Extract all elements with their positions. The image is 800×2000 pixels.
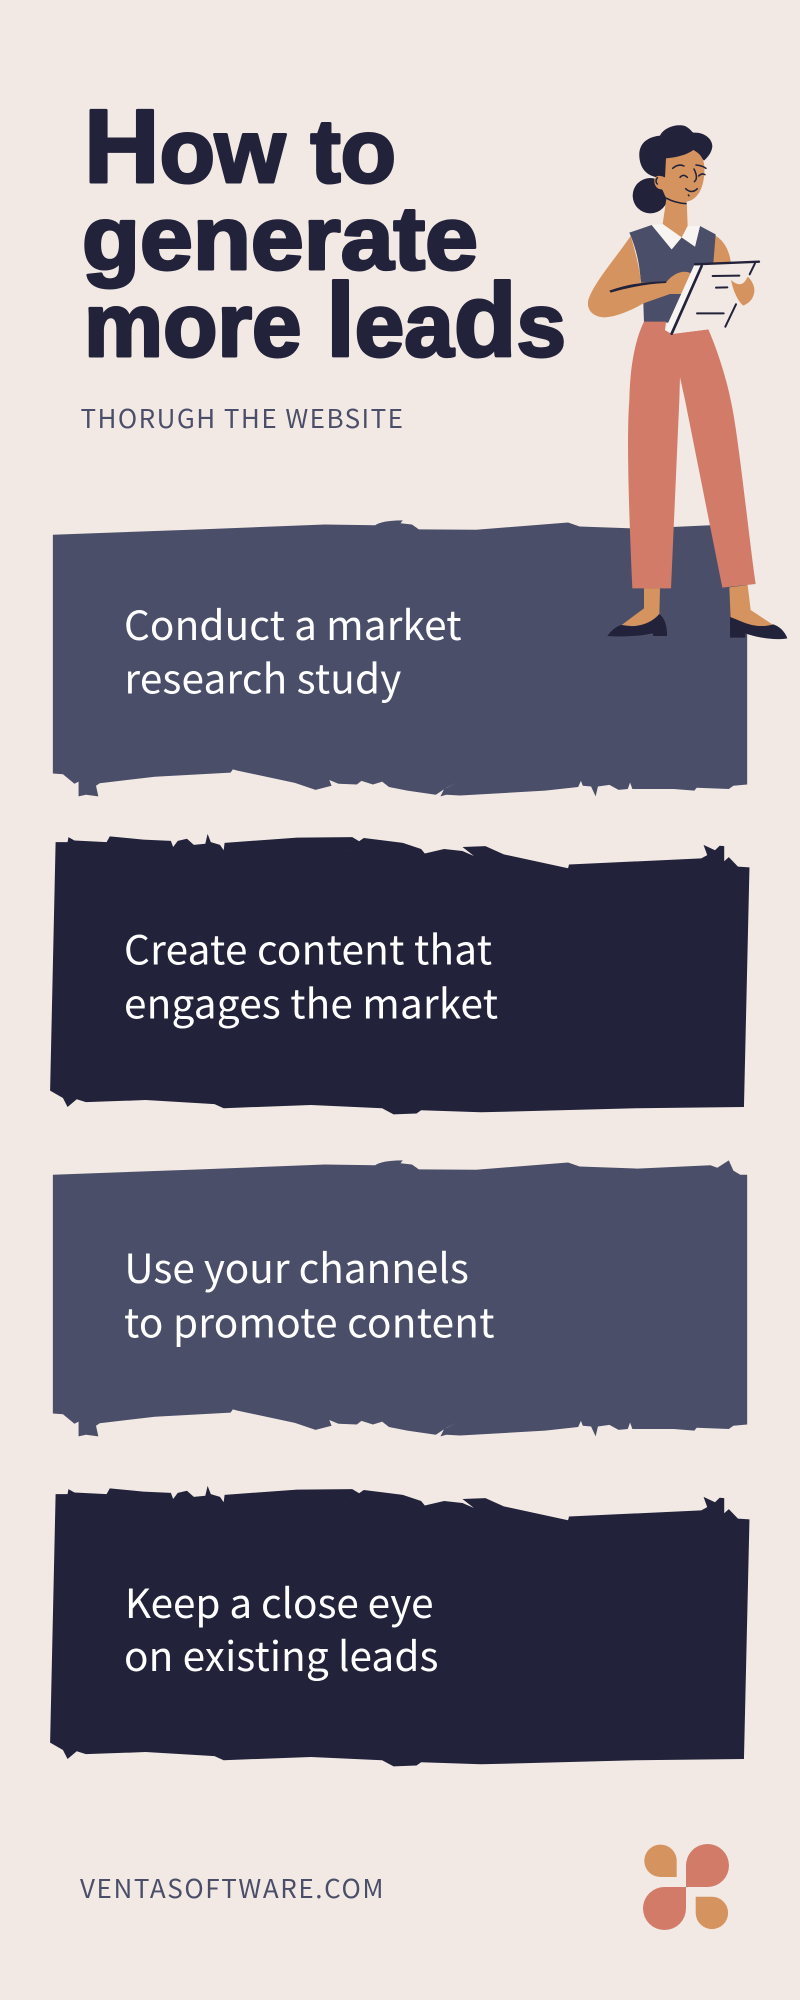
panel: step 1 conduct market research — [53, 520, 747, 796]
face — [654, 150, 704, 202]
step 3 text: to promote content — [124, 1290, 494, 1350]
shoulder — [713, 235, 731, 265]
ankles — [622, 585, 773, 630]
step 1 text: Conduct a market — [124, 593, 462, 652]
step 3 text: Use your channels — [124, 1236, 469, 1295]
panel: step 4 watch leads — [50, 1486, 749, 1766]
trousers — [628, 322, 756, 588]
step 4 text: on existing leads — [124, 1624, 438, 1683]
step 1 text: research study — [124, 646, 401, 706]
step 4 text: Keep a close eye — [125, 1571, 434, 1630]
step 2 text — [124, 918, 498, 1030]
hair — [639, 125, 712, 180]
subtitle: THORUGH THE WEBSITE — [80, 399, 403, 436]
footer website: VENTASOFTWARE.COM — [80, 1869, 384, 1906]
title: more leads — [84, 263, 566, 379]
sleeveless top — [629, 225, 716, 323]
title: generate — [82, 189, 478, 289]
step 4 text — [124, 1571, 438, 1683]
shoes — [607, 614, 787, 639]
panel: step 2 create content — [50, 834, 749, 1114]
facial features — [656, 165, 706, 204]
step 1 text — [124, 593, 462, 706]
neck — [663, 197, 688, 238]
step 2 text: engages the market — [124, 972, 498, 1030]
illustration: woman with clipboard — [588, 125, 787, 639]
title: How to — [84, 89, 396, 205]
step 3 text — [124, 1236, 494, 1350]
title — [82, 89, 566, 379]
hand — [731, 277, 754, 306]
clipboard — [665, 262, 759, 334]
hair bun — [633, 178, 668, 213]
step 2 text: Create content that — [124, 918, 492, 976]
panel: step 3 promote content — [53, 1160, 747, 1436]
collar — [652, 224, 700, 249]
arm — [588, 236, 691, 317]
arm line — [609, 281, 667, 293]
logo — [643, 1844, 729, 1930]
